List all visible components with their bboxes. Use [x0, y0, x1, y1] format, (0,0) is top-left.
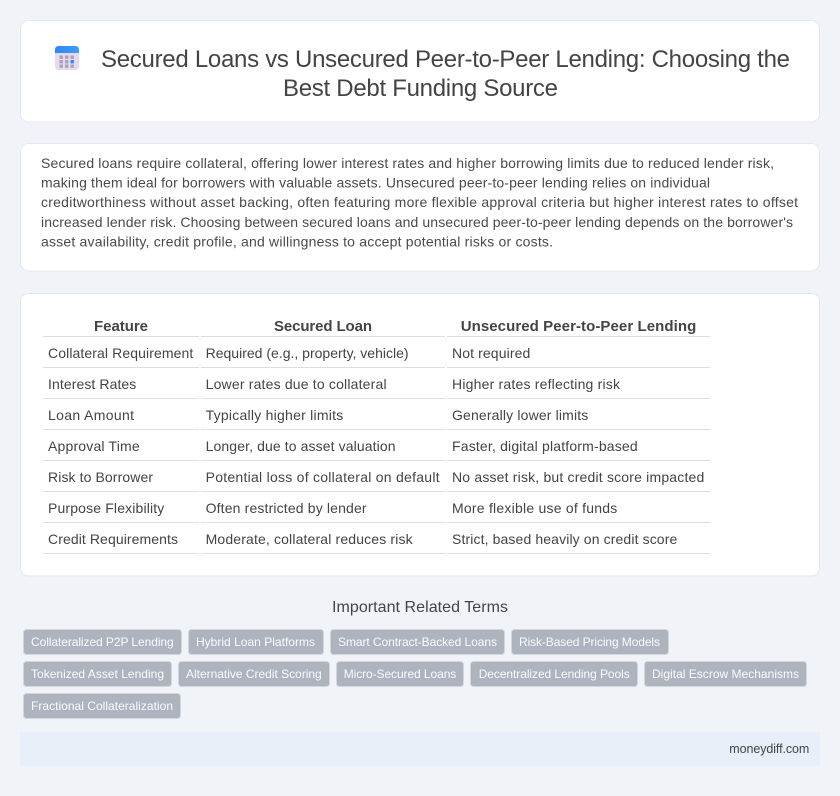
tag: [188, 630, 324, 654]
table row: risk to borrower: No asset risk, but credit score impacted: [452, 469, 704, 485]
text block: summary paragraph: asset availability, credit profile, and willingness to accept potential risks or costs.: [41, 233, 553, 249]
text block: summary paragraph: [41, 155, 798, 249]
tag: [644, 662, 806, 686]
table row: loan amount: [43, 407, 710, 430]
title: [101, 46, 790, 102]
tag: Hybrid Loan Platforms: [196, 635, 315, 649]
table header row: Secured Loan: [274, 318, 372, 335]
tag: Alternative Credit Scoring: [186, 667, 322, 681]
tag: Risk-Based Pricing Models: [519, 635, 660, 649]
tag: Micro-Secured Loans: [344, 667, 456, 681]
title: Best Debt Funding Source: [283, 75, 558, 102]
tag: [24, 630, 182, 654]
table row: purpose flexibility: Often restricted by lender: [206, 500, 367, 516]
table row: collateral requirement: Not required: [452, 345, 530, 361]
title: Secured Loans vs Unsecured Peer-to-Peer Lending: Choosing the: [101, 46, 790, 73]
table row: interest rates: Higher rates reflecting risk: [452, 376, 621, 392]
table row: approval time: Longer, due to asset valuation: [206, 438, 396, 454]
tag: [24, 694, 180, 718]
text block: summary paragraph: creditworthiness without asset backing, often featuring more flexible approval criteria but higher interest rates to offset: [41, 194, 798, 210]
table row: purpose flexibility: Purpose Flexibility: [48, 500, 164, 516]
tag: Digital Escrow Mechanisms: [652, 667, 799, 681]
table row: credit requirements: [43, 531, 710, 554]
panel: description: [20, 144, 820, 271]
tag: [470, 662, 638, 686]
tag: [24, 662, 172, 686]
table row: risk to borrower: Potential loss of collateral on default: [206, 469, 440, 485]
table row: credit requirements: Moderate, collateral reduces risk: [206, 531, 414, 547]
tag: [512, 630, 668, 654]
table header row: Unsecured Peer-to-Peer Lending: [461, 318, 696, 335]
table row: interest rates: [43, 376, 710, 399]
panel: comparison table: [20, 294, 820, 576]
tag: Decentralized Lending Pools: [479, 667, 630, 681]
table row: loan amount: Generally lower limits: [452, 407, 588, 423]
panel: title header: [20, 20, 820, 122]
table row: loan amount: Typically higher limits: [206, 407, 343, 423]
tag: Tokenized Asset Lending: [31, 667, 164, 681]
table row: collateral requirement: [43, 345, 710, 368]
text block: summary paragraph: making them ideal for borrowers with valuable assets. Unsecured peer-to-peer lending relies on individual: [41, 175, 710, 191]
table row: approval time: [43, 438, 710, 461]
table row: credit requirements: Credit Requirements: [48, 531, 178, 547]
tag: Collateralized P2P Lending: [31, 635, 174, 649]
table header row: [43, 318, 710, 337]
tag: [336, 662, 464, 686]
table row: approval time: Approval Time: [48, 438, 140, 454]
table header row: Feature: [94, 318, 148, 335]
footer: moneydiff.com: [729, 742, 809, 756]
table row: interest rates: Interest Rates: [48, 376, 136, 392]
table row: risk to borrower: Risk to Borrower: [48, 469, 153, 485]
table row: credit requirements: Strict, based heavily on credit score: [452, 531, 678, 547]
tag: Fractional Collateralization: [31, 699, 173, 713]
table row: purpose flexibility: More flexible use of funds: [452, 500, 617, 516]
footer: [20, 732, 820, 766]
tag: Smart Contract-Backed Loans: [338, 635, 497, 649]
table row: interest rates: Lower rates due to collateral: [206, 376, 387, 392]
icon: calendar: [55, 46, 79, 70]
table row: collateral requirement: Collateral Requirement: [48, 345, 193, 361]
table row: collateral requirement: Required (e.g., property, vehicle): [206, 345, 409, 361]
table row: purpose flexibility: [43, 500, 710, 523]
heading: important related terms: Important Related Terms: [332, 599, 508, 616]
tag: [178, 662, 330, 686]
table row: risk to borrower: [43, 469, 710, 492]
table row: loan amount: Loan Amount: [48, 407, 134, 423]
panel: related term tags: [24, 630, 806, 718]
text block: summary paragraph: increased lender risk. Choosing between secured loans and unsecured peer-to-peer lending depends on the borrower's: [41, 214, 793, 230]
text block: summary paragraph: Secured loans require collateral, offering lower interest rates and higher borrowing limits due to reduced lender risk,: [41, 155, 774, 171]
tag: [330, 630, 504, 654]
table row: approval time: Faster, digital platform-based: [452, 438, 638, 454]
